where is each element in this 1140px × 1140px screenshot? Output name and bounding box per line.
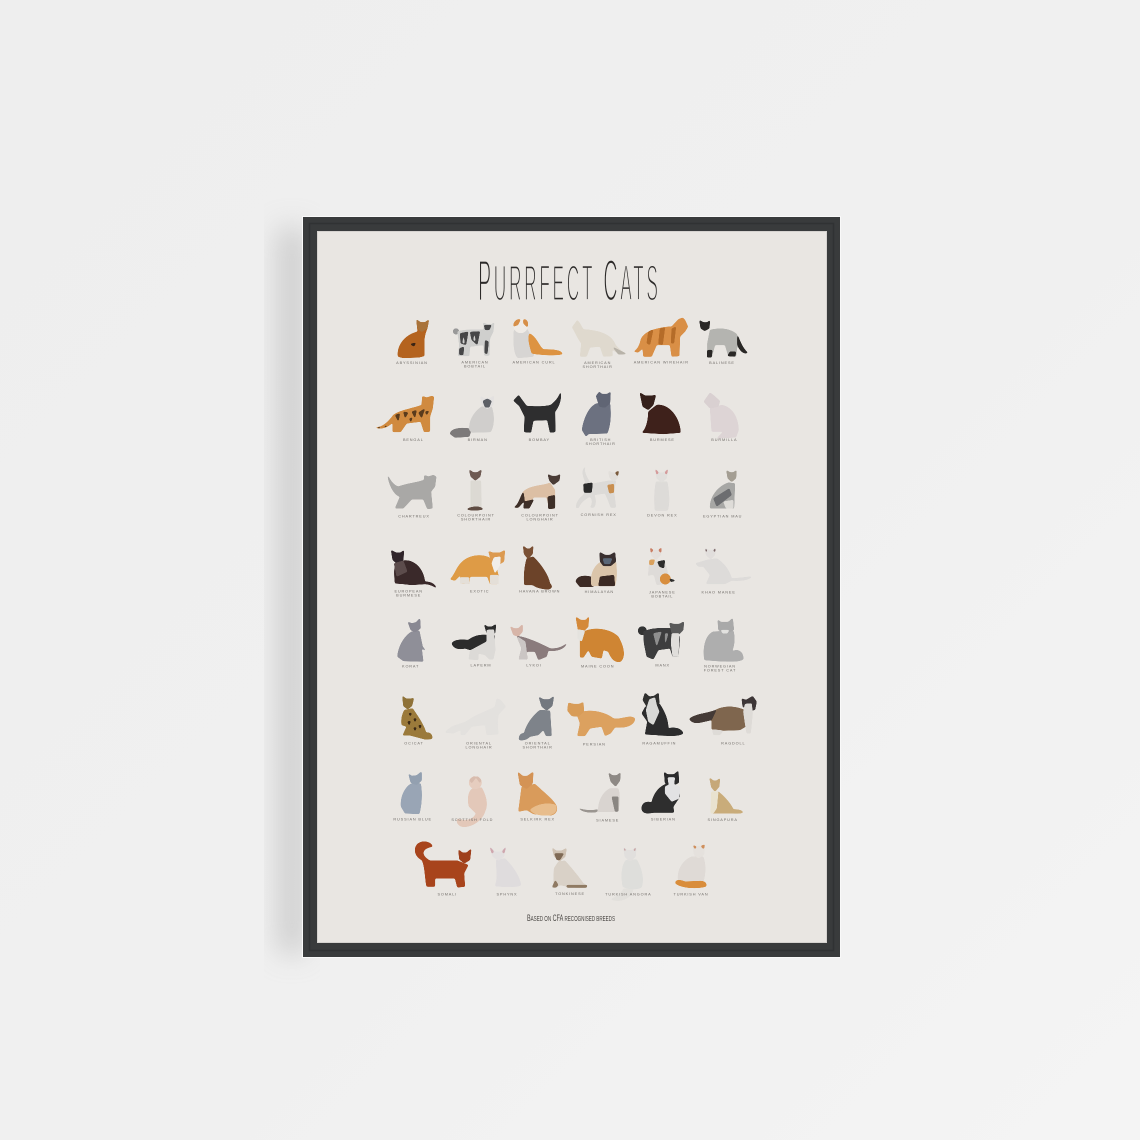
title: PURRFECT CATS	[478, 250, 661, 314]
cat: Sphynx	[489, 846, 521, 896]
cat: Burmilla	[704, 393, 739, 442]
cat: Balinese: BALINESE	[709, 361, 735, 365]
cat: Cornish Rex: CORNISH REX	[581, 513, 617, 517]
cat: Egyptian Mau	[703, 470, 742, 518]
cat: Selkirk Rex	[518, 772, 557, 822]
cat: Devon Rex: DEVON REX	[647, 514, 678, 518]
cat: Norwegian Forest Cat: FOREST CAT	[704, 668, 736, 672]
cat: American Shorthair: SHORTHAIR	[583, 365, 613, 369]
rows 6 to 8 of cats	[393, 693, 757, 901]
cat: Colourpoint Longhair: COLOURPOINT	[521, 514, 559, 518]
cat: Devon Rex	[647, 468, 678, 518]
cat: Bengal: BENGAL	[403, 438, 424, 442]
cat: Chartreux: CHARTREUX	[398, 514, 430, 518]
cat: Exotic	[450, 550, 505, 594]
cat: Khao Manee	[695, 547, 752, 594]
cat: Somali	[415, 842, 471, 896]
cat: Somali: SOMALI	[437, 892, 457, 896]
cat: Abyssinian	[396, 319, 429, 365]
rows 3 to 5 of cats	[387, 466, 752, 672]
cat: Ocicat: OCICAT	[404, 742, 424, 746]
cat: Himalayan: HIMALAYAN	[585, 590, 614, 594]
cat: American Shorthair: AMERICAN	[584, 361, 611, 365]
cat: Cornish Rex	[576, 466, 619, 517]
cat: American Shorthair	[572, 320, 627, 369]
cat: Bombay	[513, 392, 561, 442]
cat: British Shorthair: BRITISH	[590, 438, 611, 442]
cat: Siamese: SIAMESE	[596, 819, 619, 823]
cat: American Wirehair	[633, 318, 689, 365]
cat: Siberian	[642, 771, 680, 822]
cat: Korat	[397, 618, 427, 669]
cat: American Bobtail: AMERICAN	[461, 360, 489, 364]
cat: Singapura: SINGAPURA	[707, 818, 738, 822]
cat: Siberian: SIBERIAN	[651, 818, 676, 822]
cat: Chartreux	[387, 474, 436, 518]
cat: LyKoi: LYKOI	[526, 664, 542, 668]
cat: Siamese	[577, 772, 621, 823]
cat: American Curl: AMERICAN CURL	[513, 361, 555, 365]
cat: Bombay: BOMBAY	[529, 438, 550, 442]
cat: Japanese Bobtail	[648, 547, 676, 598]
cat: American Bobtail	[453, 322, 494, 368]
cat: American Wirehair: AMERICAN WIREHAIR	[634, 361, 689, 365]
cat: British Shorthair: SHORTHAIR	[586, 442, 616, 446]
cat: Colourpoint Longhair: LONGHAIR	[527, 518, 553, 522]
cat: Scottish Fold: SCOTTISH FOLD	[451, 818, 493, 822]
cat: Ragdoll	[689, 696, 757, 746]
cat: Persian: PERSIAN	[583, 742, 606, 746]
cat: Tonkinese	[552, 847, 587, 896]
cat: Turkish Van	[673, 844, 708, 896]
cat: Balinese	[699, 320, 748, 365]
cat: Sphynx: SPHYNX	[497, 892, 517, 896]
cat: Turkish Van: TURKISH VAN	[673, 892, 708, 896]
cat: American Bobtail: BOBTAIL	[464, 364, 486, 368]
cat: Havana Brown: HAVANA BROWN	[519, 590, 560, 594]
cat: Russian Blue	[393, 771, 432, 822]
cat: Oriental Shorthair: SHORTHAIR	[523, 746, 553, 750]
wall shadow of frame	[278, 228, 306, 954]
cat: Oriental Shorthair: ORIENTAL	[525, 742, 551, 746]
cat: LaPerm: LAPERM	[471, 664, 491, 668]
cat: British Shorthair	[582, 392, 616, 446]
cat: Maine Coon: MAINE COON	[581, 664, 614, 668]
cat: Korat: KORAT	[402, 665, 419, 669]
cat: Ocicat	[401, 696, 432, 746]
cat: Scottish Fold	[451, 776, 493, 827]
cat: Colourpoint Shorthair	[457, 469, 495, 522]
cat: Himalayan	[576, 552, 617, 594]
cat: Ragamuffin: RAGAMUFFIN	[642, 741, 676, 745]
cat: Abyssinian: ABYSSINIAN	[396, 361, 428, 365]
cat: Egyptian Mau: EGYPTIAN MAU	[703, 514, 742, 518]
cat: Exotic: EXOTIC	[470, 590, 489, 594]
cat: Birman: BIRMAN	[468, 438, 488, 442]
cat: Colourpoint Shorthair: SHORTHAIR	[461, 518, 491, 522]
row 1 and 2 of cats	[373, 318, 748, 446]
cat: American Curl	[513, 319, 563, 365]
cat: Ragamuffin	[642, 693, 683, 745]
cat: Turkish Angora: TURKISH ANGORA	[605, 893, 652, 897]
cat: Burmilla: BURMILLA	[711, 438, 737, 442]
cat: Maine Coon	[576, 616, 624, 668]
cat: Norwegian Forest Cat: NORWEGIAN	[704, 664, 736, 668]
cat: Japanese Bobtail: JAPANESE	[649, 590, 676, 594]
cat: Havana Brown	[519, 545, 560, 594]
cat: Oriental Shorthair	[519, 696, 554, 750]
cat: LyKoi	[510, 624, 567, 668]
cat: Oriental Longhair: ORIENTAL	[466, 741, 492, 745]
cat: Manx	[638, 621, 684, 668]
cat: Japanese Bobtail: BOBTAIL	[651, 594, 673, 598]
cat: Persian	[567, 702, 635, 746]
cat: Manx: MANX	[655, 664, 670, 668]
cat: LaPerm	[452, 624, 496, 668]
cat: Ragdoll: RAGDOLL	[721, 742, 746, 746]
cat: European Burmese: BURMESE	[396, 594, 421, 598]
cat: Selkirk Rex: SELKIRK REX	[520, 818, 555, 822]
cat: Russian Blue: RUSSIAN BLUE	[393, 818, 432, 822]
cat: Turkish Angora	[605, 847, 652, 901]
frame	[302, 216, 841, 958]
cat: Khao Manee: KHAO MANEE	[702, 590, 736, 594]
cat: Burmese	[640, 392, 681, 442]
cat: Bengal	[373, 396, 434, 442]
cat: European Burmese	[391, 550, 437, 598]
cat: Tonkinese: TONKINESE	[555, 892, 585, 896]
cat: Colourpoint Longhair	[513, 474, 560, 522]
footnote: BASED ON CFA RECOGNISED BREEDS	[527, 913, 615, 924]
cat: Singapura	[707, 777, 743, 822]
cat: Burmese: BURMESE	[650, 438, 675, 442]
cat: European Burmese: EUROPEAN	[394, 590, 423, 594]
cat: Colourpoint Shorthair: COLOURPOINT	[457, 514, 495, 518]
cat: Birman	[450, 396, 494, 442]
cat: Norwegian Forest Cat	[704, 618, 743, 672]
cat: Oriental Longhair	[445, 698, 506, 749]
cat: Oriental Longhair: LONGHAIR	[466, 745, 492, 749]
